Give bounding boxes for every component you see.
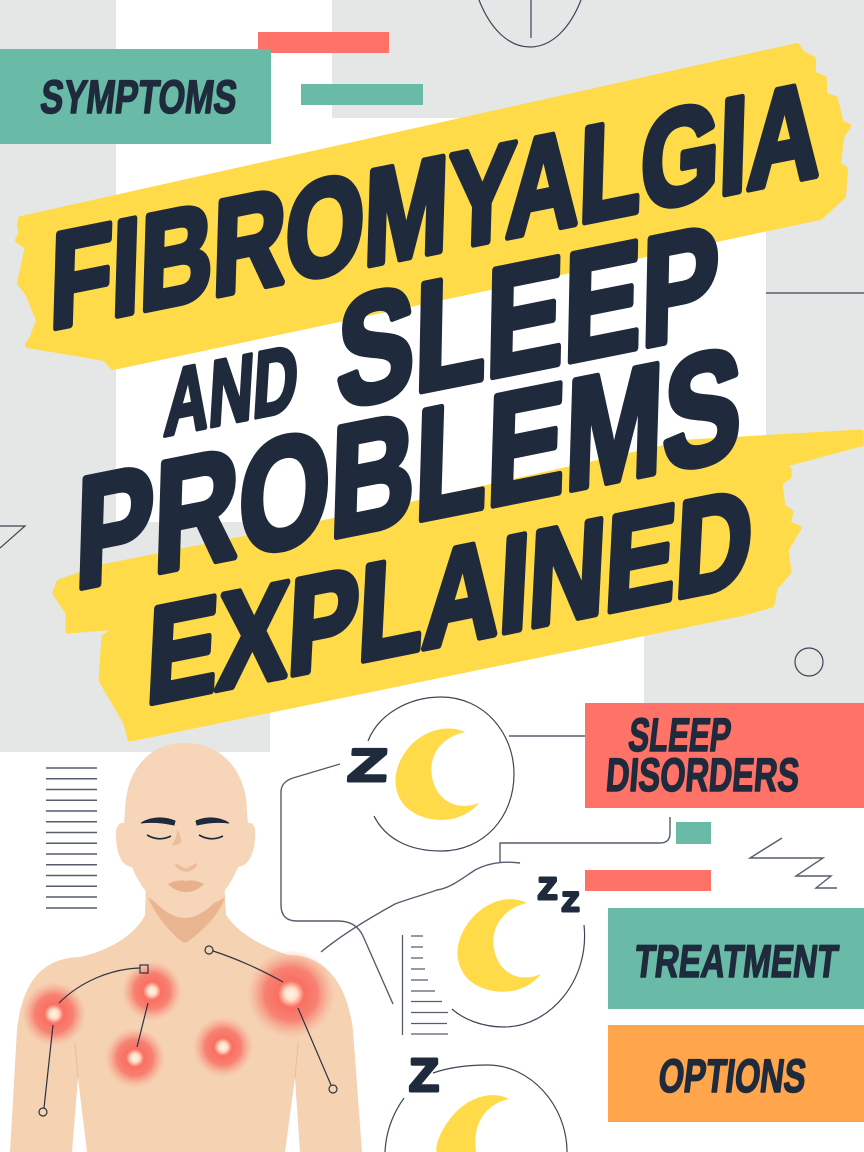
label: options	[608, 1025, 864, 1122]
sleep icon: lower moon: Z	[409, 1049, 439, 1101]
sleep icon: upper moon	[346, 697, 514, 851]
head	[116, 743, 255, 918]
sleep icon: middle moon	[452, 871, 585, 1027]
sleep icon: lower moon	[385, 1049, 567, 1152]
neck shadow	[148, 897, 225, 942]
body	[10, 880, 362, 1152]
eyebrow right	[196, 818, 229, 825]
eye left	[147, 835, 171, 839]
title line: and: AND	[162, 325, 301, 457]
sleep icon: upper moon: Z	[346, 739, 389, 791]
sleep icon: middle moon: Z	[562, 887, 579, 917]
person illustration	[10, 743, 362, 1152]
pain points	[22, 950, 335, 1088]
pain callout lines	[39, 946, 337, 1116]
brush stroke: lower yellow	[55, 432, 861, 739]
arm creases	[75, 1043, 298, 1078]
title line: sleep: SLEEP	[335, 192, 721, 442]
eyebrow left	[141, 818, 175, 825]
tick list left	[46, 768, 97, 908]
zigzag line	[750, 838, 837, 888]
brush stroke: top yellow	[18, 46, 848, 367]
accent bar: teal top	[301, 84, 423, 105]
accent bar: coral small	[585, 870, 711, 891]
sleep icon: middle moon: Z	[538, 871, 557, 906]
label: symptoms	[0, 49, 271, 144]
label: symptoms: SYMPTOMS	[38, 70, 240, 123]
label: sleep disorders	[585, 703, 864, 808]
label: treatment	[608, 908, 864, 1009]
accent bar: coral top	[258, 32, 389, 53]
tick scale middle	[402, 935, 448, 1035]
connector lines	[281, 736, 670, 1004]
nose	[172, 829, 197, 872]
label: sleep disorders: SLEEP	[626, 708, 734, 761]
decorative outline shapes	[0, 0, 864, 676]
title	[48, 53, 823, 734]
accent bar: teal small	[676, 822, 711, 844]
eye right	[199, 835, 223, 839]
lips	[168, 880, 204, 892]
